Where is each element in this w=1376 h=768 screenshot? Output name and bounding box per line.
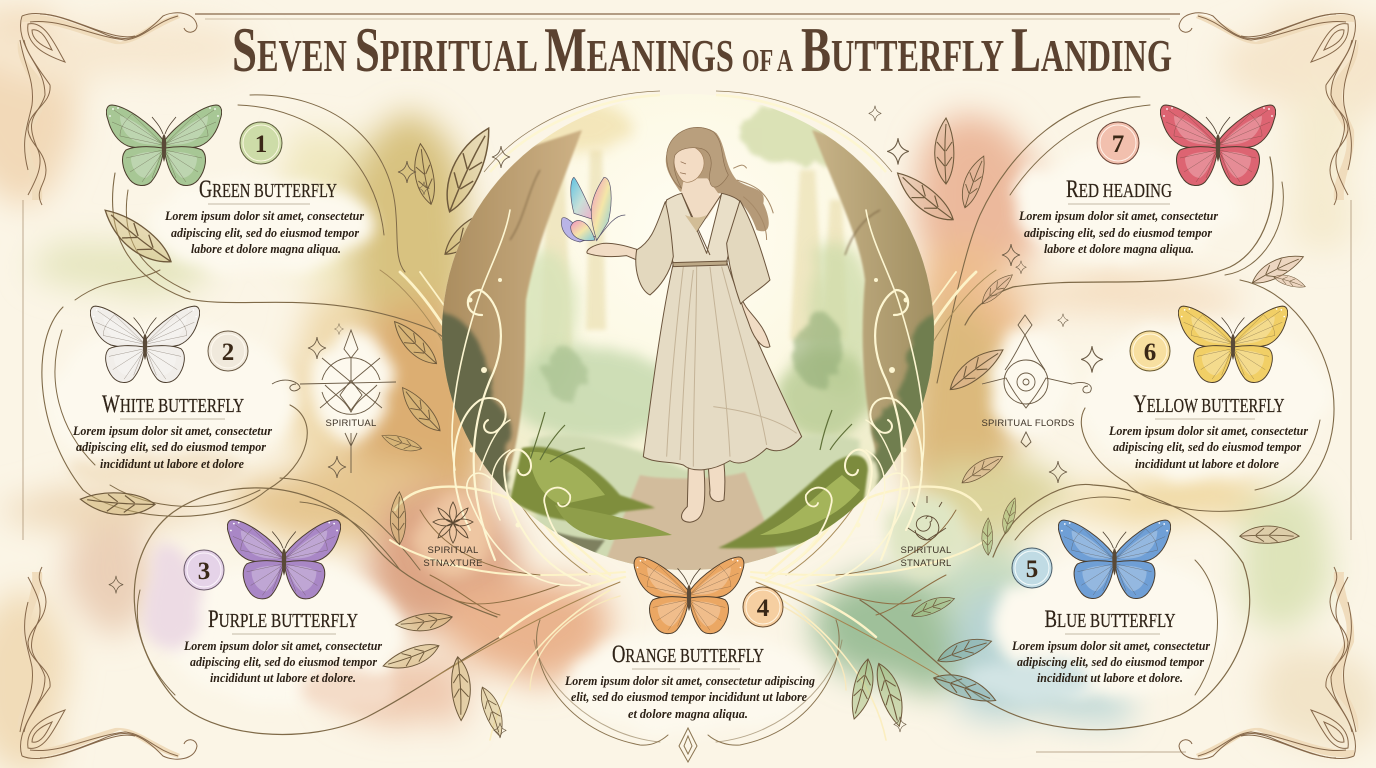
- panel 4: orange butterfly: elit, sed do eiusmod tempor incididunt ut labore: [571, 690, 807, 704]
- panel 7: red butterfly: RED HEADING: [1066, 176, 1172, 203]
- neck and chest: [680, 178, 721, 222]
- hair front: [667, 127, 728, 188]
- icon: spiritual flower, lower left: [423, 502, 483, 569]
- panel 6: yellow butterfly: 6: [1144, 339, 1156, 366]
- sleeves: [636, 202, 673, 295]
- panel 4: orange butterfly: Lorem ipsum dolor sit amet, consectetur adipiscing: [564, 674, 815, 688]
- panel 3: purple butterfly: adipiscing elit, sed do eiusmod tempor: [190, 655, 377, 669]
- panel 2: white butterfly: incididunt ut labore et dolore: [100, 457, 244, 471]
- panel 3: purple butterfly: PURPLE BUTTERFLY: [208, 606, 358, 633]
- panel 4: orange butterfly: 4: [757, 595, 770, 622]
- panel 2: white butterfly: [72, 306, 272, 471]
- hair back: [666, 127, 769, 231]
- icon: spiritual flower, lower left: SPIRITUAL: [428, 545, 478, 556]
- panel 7: red butterfly: labore et dolore magna aliqua.: [1044, 242, 1194, 256]
- panel 2: white butterfly: Lorem ipsum dolor sit amet, consectetur: [72, 424, 272, 438]
- panel 5: blue butterfly: Lorem ipsum dolor sit amet, consectetur: [1011, 639, 1210, 653]
- panel 6: yellow butterfly: [1108, 306, 1308, 471]
- panel 5: blue butterfly: BLUE BUTTERFLY: [1044, 606, 1176, 633]
- panel 5: blue butterfly: [1011, 520, 1210, 685]
- panel 1: green butterfly: Lorem ipsum dolor sit amet, consectetur: [164, 209, 364, 223]
- icon: spiritual florals, right: SPIRITUAL FLORDS: [981, 418, 1075, 429]
- panel 1: green butterfly: GREEN BUTTERFLY: [199, 176, 337, 203]
- panel 3: purple butterfly: [183, 520, 382, 685]
- panel 6: yellow butterfly: adipiscing elit, sed do eiusmod tempor: [1113, 440, 1301, 454]
- panel 6: yellow butterfly: YELLOW BUTTERFLY: [1134, 391, 1284, 418]
- panel 6: yellow butterfly: Lorem ipsum dolor sit amet, consectetur: [1108, 424, 1308, 438]
- panel 1: green butterfly: adipiscing elit, sed do eiusmod tempor: [171, 226, 359, 240]
- panel 3: purple butterfly: Lorem ipsum dolor sit amet, consectetur: [183, 639, 382, 653]
- mossy ground and path: [500, 410, 868, 575]
- distant trees: [540, 150, 848, 360]
- bodice: [664, 193, 742, 263]
- circle arc outlines and glowing flourishes: [452, 91, 924, 585]
- face: [674, 145, 704, 182]
- skirt: [643, 262, 802, 470]
- panel 5: blue butterfly: 5: [1026, 556, 1038, 583]
- legs and feet: [682, 467, 705, 522]
- central forest scene: [430, 85, 950, 575]
- icon: spiritual spiral sun, lower right: SPIRITUAL: [901, 545, 951, 556]
- vines and leaves: [80, 118, 1307, 740]
- arm right: [742, 298, 770, 347]
- icon: spiritual florals, right: [981, 315, 1091, 447]
- panel 7: red butterfly: adipiscing elit, sed do eiusmod tempor: [1024, 226, 1212, 240]
- panel 2: white butterfly: 2: [222, 339, 234, 366]
- panel 7: red butterfly: 7: [1112, 131, 1124, 158]
- panel 2: white butterfly: adipiscing elit, sed do eiusmod tempor: [76, 440, 266, 454]
- tree trunks: [442, 130, 934, 483]
- background foliage: [490, 99, 875, 440]
- panel 1: green butterfly: labore et dolore magna aliqua.: [191, 242, 341, 256]
- icon: spiritual compass, left: SPIRITUAL: [326, 418, 376, 429]
- dark olive edges: [442, 310, 934, 496]
- panel 1: green butterfly: [106, 105, 364, 256]
- icon: spiritual compass, left: [272, 330, 396, 473]
- icon: spiritual flower, lower left: STNAXTURE: [423, 558, 483, 569]
- panel 3: purple butterfly: 3: [198, 558, 210, 585]
- icon: spiritual spiral sun, lower right: STNATURL: [900, 558, 952, 569]
- panel 7: red butterfly: Lorem ipsum dolor sit amet, consectetur: [1018, 209, 1218, 223]
- panel 7: red butterfly: [1018, 105, 1276, 256]
- panel 5: blue butterfly: adipiscing elit, sed do eiusmod tempor: [1017, 655, 1204, 669]
- panel 5: blue butterfly: incididunt ut labore et dolore.: [1037, 671, 1183, 685]
- title: SEVEN SPIRITUAL MEANINGS OF A BUTTERFLY LANDING: [232, 14, 1172, 85]
- panel 4: orange butterfly: [564, 557, 815, 721]
- panel 3: purple butterfly: incididunt ut labore et dolore.: [210, 671, 356, 685]
- panel 2: white butterfly: WHITE BUTTERFLY: [102, 391, 244, 418]
- icon: spiritual spiral sun, lower right: [900, 496, 952, 569]
- arm left: [587, 243, 638, 261]
- panel 4: orange butterfly: et dolore magna aliqua.: [628, 707, 748, 721]
- panel 4: orange butterfly: ORANGE BUTTERFLY: [612, 641, 764, 668]
- panel 6: yellow butterfly: incididunt ut labore et dolore: [1135, 457, 1279, 471]
- small pastel butterfly above the hand: [561, 177, 625, 242]
- woman figure: [587, 127, 802, 522]
- belt: [673, 261, 727, 267]
- sparkles: [109, 106, 1103, 738]
- panel 1: green butterfly: 1: [255, 131, 267, 158]
